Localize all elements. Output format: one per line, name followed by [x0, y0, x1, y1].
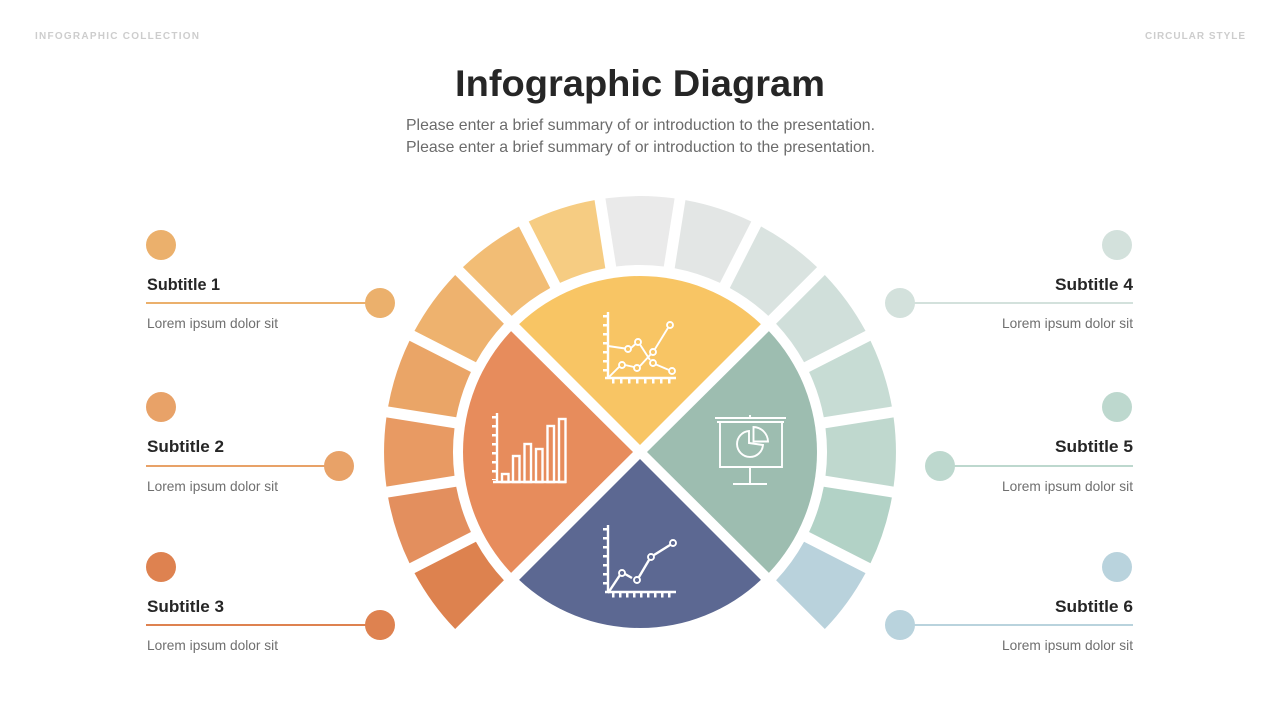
panel: subtitle 5: Lorem ipsum dolor sit: [1002, 478, 1133, 494]
panel: subtitle 3: Lorem ipsum dolor sit: [147, 637, 278, 653]
icon: line chart: [605, 525, 676, 595]
panel: subtitle 6: Subtitle 6: [1055, 597, 1133, 616]
wedge: yellow: [519, 276, 761, 445]
panel: subtitle 4: Subtitle 4: [1055, 275, 1134, 294]
panel: subtitle 5: [925, 392, 1133, 494]
panel: subtitle 3: Subtitle 3: [147, 597, 224, 616]
summary text: [406, 117, 875, 156]
panel: subtitle 5: Subtitle 5: [1055, 437, 1133, 456]
panel: subtitle 6: [885, 552, 1133, 653]
panel: subtitle 2: Subtitle 2: [147, 437, 224, 456]
panel: subtitle 3: [146, 552, 395, 653]
header label right: CIRCULAR STYLE: [1145, 31, 1245, 42]
panel: subtitle 4: [885, 230, 1134, 331]
panel: subtitle 6: Lorem ipsum dolor sit: [1002, 637, 1133, 653]
panel: subtitle 2: [146, 392, 354, 494]
summary text: Please enter a brief summary of or introduction to the presentation.: [406, 117, 875, 134]
panel: subtitle 1: Lorem ipsum dolor sit: [147, 315, 278, 331]
panel: subtitle 4: Lorem ipsum dolor sit: [1002, 315, 1133, 331]
panel: subtitle 1: Subtitle 1: [147, 275, 220, 294]
wedge: orange: [463, 331, 633, 573]
icon: presentation board: [715, 415, 786, 484]
wedge: blue: [519, 459, 761, 628]
icon: bar chart: [493, 413, 566, 482]
panel: subtitle 2: Lorem ipsum dolor sit: [147, 478, 278, 494]
panel: subtitle 1: [146, 230, 395, 331]
title: Infographic Diagram: [455, 63, 825, 104]
outer segmented ring: [384, 196, 896, 630]
header label left: INFOGRAPHIC COLLECTION: [35, 31, 199, 42]
icon: double line chart: [605, 312, 676, 381]
wedge: green: [647, 331, 817, 573]
summary text: Please enter a brief summary of or introduction to the presentation.: [406, 139, 875, 156]
